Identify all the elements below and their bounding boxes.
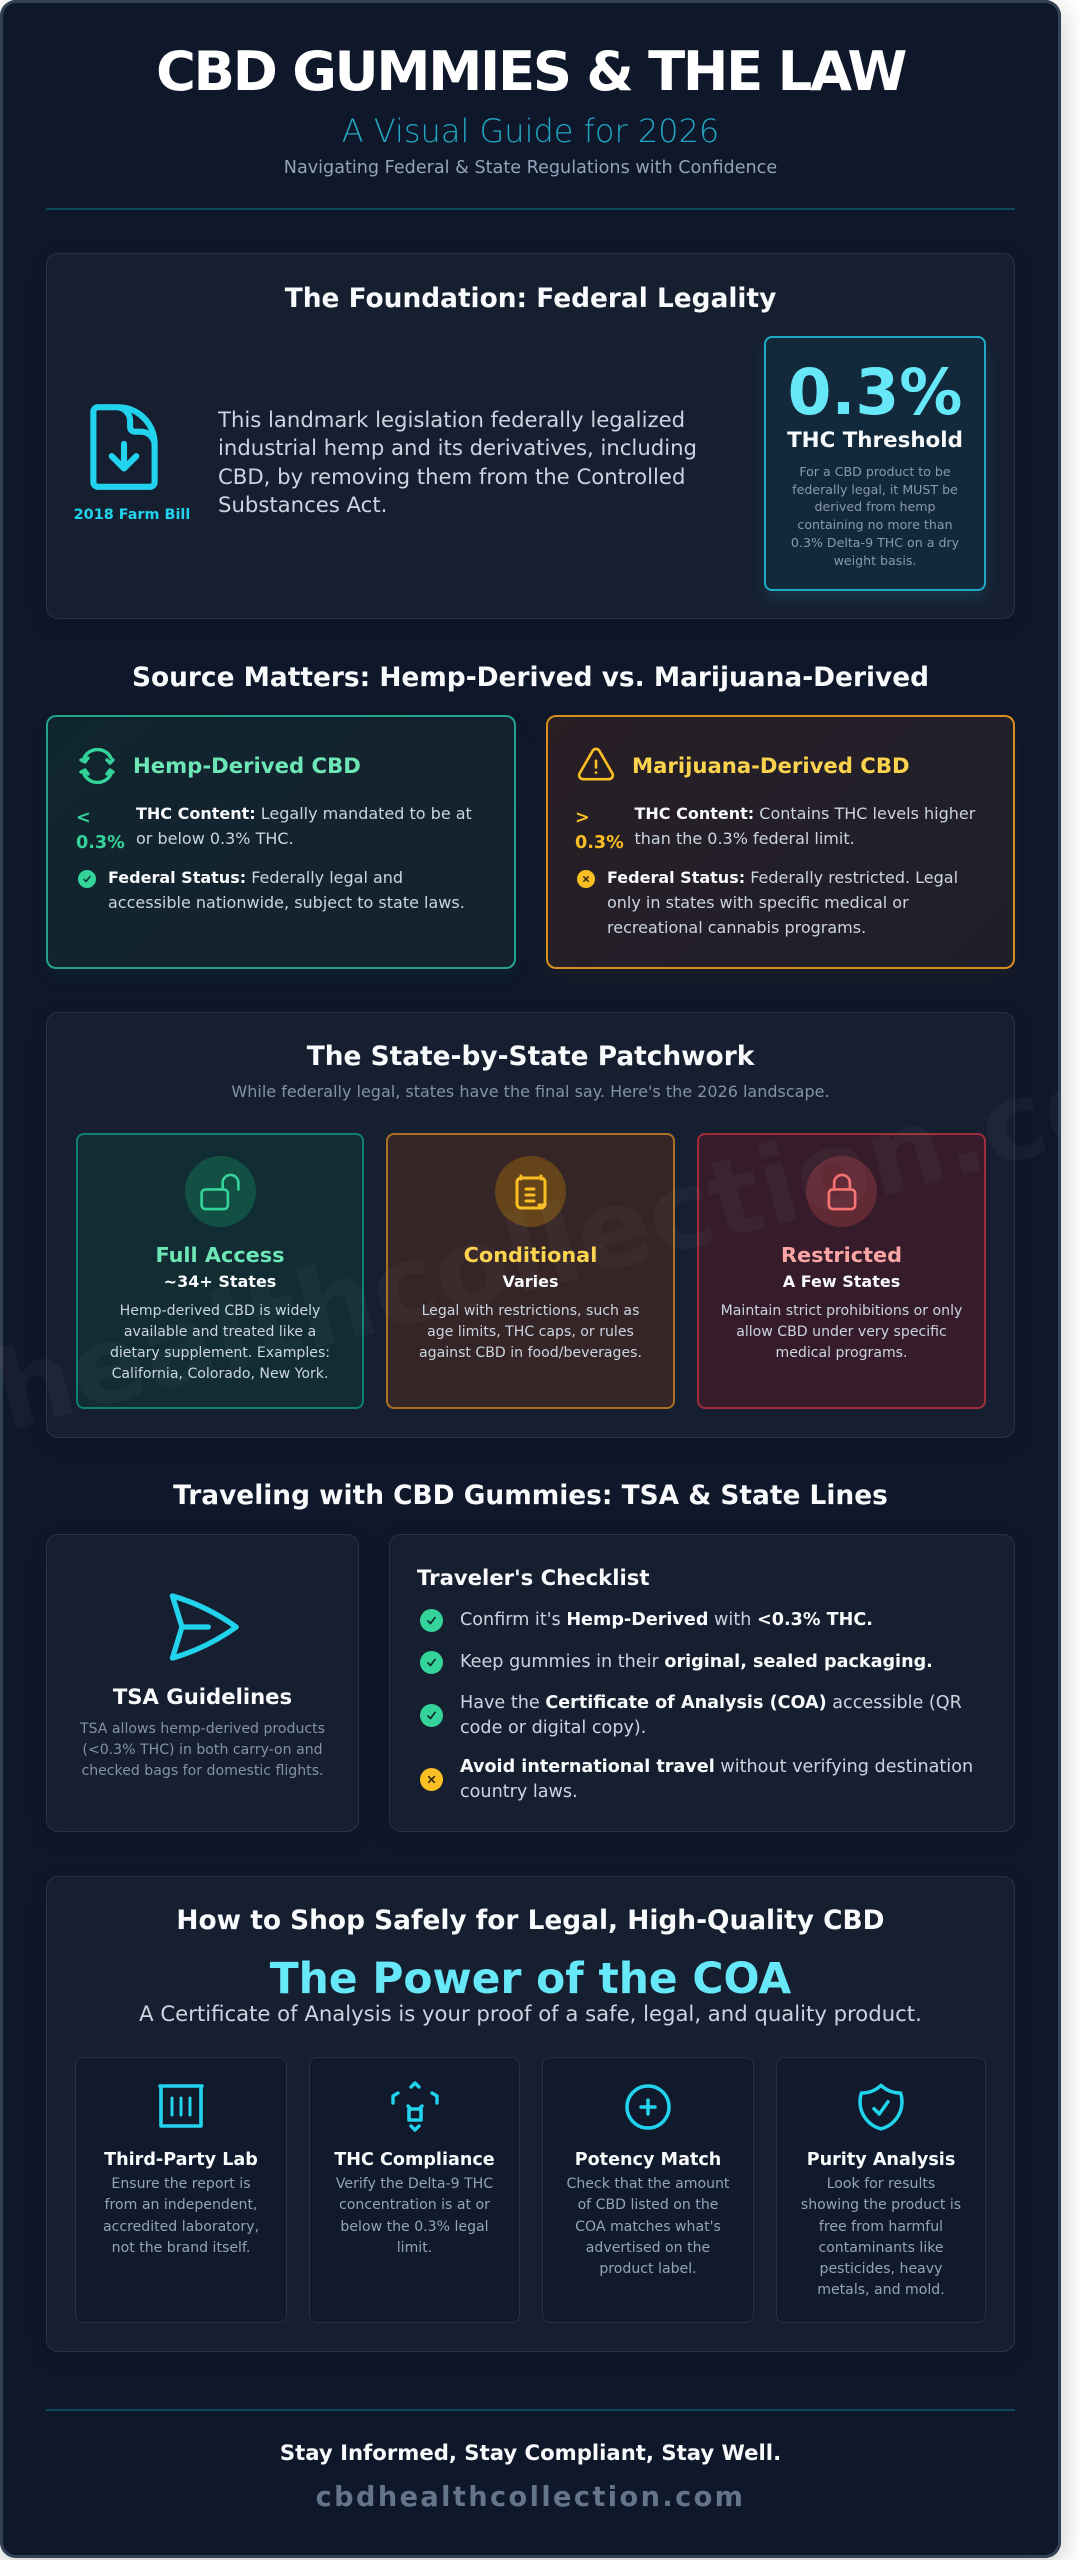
- card title: Restricted: [781, 1243, 902, 1267]
- footer tagline: Stay Informed, Stay Compliant, Stay Well.: [280, 2440, 781, 2465]
- icon: hemp cycle: [79, 748, 115, 784]
- text: COA matches what's: [575, 2219, 721, 2235]
- card text: [721, 1302, 962, 1361]
- card text: [419, 1302, 642, 1361]
- callout text: For a CBD product to be: [799, 464, 951, 479]
- text: [336, 2176, 493, 2256]
- text: from an independent,: [105, 2197, 257, 2213]
- card: conditional: [386, 1133, 675, 1409]
- panel: federal legality: [46, 253, 1015, 619]
- title: Potency Match: [575, 2150, 721, 2170]
- text: accredited laboratory,: [103, 2219, 259, 2235]
- thc content text: THC Content: Legally mandated to be at: [136, 804, 472, 823]
- text: [801, 2176, 961, 2298]
- callout: thc threshold: [764, 336, 986, 591]
- checklist item 4: country laws.: [460, 1782, 578, 1802]
- card: thc compliance: [309, 2057, 520, 2323]
- text: Look for results: [827, 2176, 935, 2192]
- icon: compliance arrows: [391, 2081, 439, 2132]
- card text: California, Colorado, New York.: [112, 1366, 328, 1382]
- card text: age limits, THC caps, or rules: [427, 1324, 634, 1340]
- text: Check that the amount: [567, 2176, 729, 2192]
- icon: check: [420, 1704, 443, 1727]
- thc content text: than the 0.3% federal limit.: [634, 829, 855, 848]
- text: checked bags for domestic flights.: [81, 1763, 324, 1779]
- callout heading: THC Threshold: [787, 428, 963, 452]
- federal status text: accessible nationwide, subject to state laws.: [108, 892, 465, 912]
- text: limit.: [397, 2240, 432, 2256]
- federal status text: [108, 868, 465, 912]
- thc content text: or below 0.3% THC.: [136, 829, 294, 848]
- card text: available and treated like a: [124, 1324, 316, 1340]
- text: [103, 2176, 259, 2256]
- text: [567, 2176, 730, 2277]
- checklist item 4: [460, 1756, 973, 1802]
- panel: marijuana-derived: [546, 715, 1015, 969]
- federal status text: [607, 868, 958, 936]
- farm bill description: industrial hemp and its derivatives, including: [218, 435, 697, 460]
- icon: cross: [420, 1768, 443, 1791]
- panel: hemp-derived: [46, 715, 516, 969]
- text: TSA allows hemp-derived products: [80, 1720, 325, 1736]
- farm bill description: Substances Act.: [218, 492, 387, 517]
- heading: Marijuana-Derived CBD: [632, 752, 910, 778]
- state count: ~34+ States: [164, 1272, 276, 1291]
- icon: warning triangle: [578, 748, 614, 780]
- text: [80, 1720, 325, 1779]
- panel: tsa guidelines: [46, 1534, 359, 1832]
- thc badge: [76, 808, 125, 853]
- thc badge: <: [76, 808, 91, 828]
- subtitle: A Visual Guide for 2026: [342, 112, 719, 150]
- icon circle: unlocked: [184, 1156, 256, 1227]
- checklist item 3: code or digital copy).: [460, 1718, 646, 1738]
- text: (<0.3% THC) in both carry-on and: [82, 1742, 323, 1758]
- title: Purity Analysis: [807, 2150, 955, 2170]
- text: of CBD listed on the: [578, 2197, 718, 2213]
- icon: document download: [90, 404, 158, 490]
- text: metals, and mold.: [817, 2282, 945, 2298]
- federal status text: only in states with specific medical or: [607, 892, 909, 912]
- heading: the foundation: The Foundation: Federal Legality: [285, 283, 776, 314]
- state count: Varies: [502, 1272, 559, 1291]
- card text: Legal with restrictions, such as: [422, 1302, 639, 1318]
- heading: Hemp-Derived CBD: [133, 752, 361, 778]
- heading: traveling: Traveling with CBD Gummies: TSA & State Lines: [173, 1480, 888, 1511]
- farm bill description: [218, 407, 697, 517]
- thc badge: 0.3%: [76, 833, 125, 853]
- text: concentration is at or: [339, 2197, 490, 2213]
- heading: TSA Guidelines: [113, 1684, 292, 1709]
- thc content text: [634, 804, 976, 848]
- text: pesticides, heavy: [820, 2261, 942, 2277]
- heading: Traveler's Checklist: [417, 1565, 650, 1590]
- icon: check: [78, 870, 96, 888]
- tagline: Navigating Federal & State Regulations with Confidence: [284, 158, 777, 178]
- checklist item 4: Avoid international travel without verifying destination: [460, 1756, 973, 1776]
- callout text: 0.3% Delta-9 THC on a dry: [791, 535, 959, 550]
- card: third-party lab: [75, 2057, 287, 2323]
- icon: cross: [577, 870, 595, 888]
- thc badge: >: [575, 808, 590, 828]
- icon: paper airplane: [170, 1593, 239, 1661]
- thc badge: 0.3%: [575, 833, 624, 853]
- footer website: cbdhealthcollection.com: [316, 2482, 745, 2512]
- checklist item 1: Confirm it's Hemp-Derived with <0.3% THC.: [460, 1610, 873, 1630]
- card text: Maintain strict prohibitions or only: [721, 1302, 962, 1318]
- icon: shield check: [858, 2084, 904, 2131]
- title: THC Compliance: [334, 2150, 495, 2170]
- callout text: containing no more than: [797, 517, 953, 532]
- callout text: [791, 464, 959, 568]
- farm bill description: This landmark legislation federally legalized: [218, 407, 685, 432]
- card text: dietary supplement. Examples:: [110, 1345, 330, 1361]
- title: CBD GUMMIES & THE LAW: [156, 40, 905, 103]
- farm bill description: CBD, by removing them from the Controlled: [218, 464, 685, 489]
- panel: state patchwork: [46, 1012, 1015, 1438]
- card: purity analysis: [776, 2057, 986, 2323]
- thc content text: [136, 804, 472, 848]
- text: not the brand itself.: [112, 2240, 250, 2256]
- big number: 0.3%: [788, 356, 962, 429]
- card: restricted: [697, 1133, 986, 1409]
- subheading: While federally legal, states have the final say. Here's the 2026 landscape.: [231, 1082, 830, 1101]
- icon: plus circle: [625, 2084, 671, 2130]
- heading: How to Shop Safely for Legal, High-Quality CBD: [176, 1905, 885, 1936]
- heading: The State-by-State Patchwork: [307, 1041, 754, 1072]
- callout text: derived from hemp: [815, 499, 935, 514]
- callout text: weight basis.: [834, 553, 916, 568]
- state count: A Few States: [783, 1272, 900, 1291]
- icon: check: [420, 1609, 443, 1632]
- text: showing the product is: [801, 2197, 961, 2213]
- checklist item 2: Keep gummies in their original, sealed packaging.: [460, 1652, 933, 1672]
- card text: [110, 1302, 330, 1382]
- text: Verify the Delta-9 THC: [336, 2176, 493, 2192]
- card text: Hemp-derived CBD is widely: [120, 1302, 320, 1318]
- checklist item 3: Have the Certificate of Analysis (COA) accessible (QR: [460, 1692, 962, 1712]
- icon: check: [420, 1651, 443, 1674]
- card text: medical programs.: [775, 1345, 908, 1361]
- icon circle: locked: [806, 1156, 877, 1227]
- text: product label.: [599, 2261, 697, 2277]
- panel: shop safely: [46, 1876, 1015, 2352]
- card text: against CBD in food/beverages.: [419, 1345, 642, 1361]
- text: contaminants like: [818, 2240, 944, 2256]
- text: advertised on the: [586, 2240, 710, 2256]
- federal status text: Federal Status: Federally restricted. Legal: [607, 868, 958, 886]
- text: Ensure the report is: [111, 2176, 251, 2192]
- federal status text: recreational cannabis programs.: [607, 918, 866, 936]
- panel: traveler's checklist: [389, 1534, 1015, 1832]
- card title: Conditional: [464, 1243, 597, 1267]
- text: free from harmful: [819, 2219, 943, 2235]
- text: below the 0.3% legal: [340, 2219, 489, 2235]
- card text: allow CBD under very specific: [736, 1324, 947, 1340]
- callout text: federally legal, it MUST be: [792, 482, 958, 497]
- thc content text: THC Content: Contains THC levels higher: [634, 804, 975, 823]
- heading: power of the coa: The Power of the COA: [270, 1954, 791, 2003]
- checklist item 3: [460, 1692, 962, 1738]
- icon circle: clipboard: [495, 1156, 566, 1227]
- thc badge: [575, 808, 624, 853]
- label: 2018 farm bill: 2018 Farm Bill: [74, 507, 190, 523]
- card: potency match: [542, 2057, 754, 2323]
- heading: source matters: Source Matters: Hemp-Derived vs. Marijuana-Derived: [132, 662, 929, 693]
- card: full access: [76, 1133, 364, 1409]
- icon: lab report: [158, 2084, 204, 2128]
- federal status text: Federal Status: Federally legal and: [108, 868, 403, 886]
- subheading: A Certificate of Analysis is your proof of a safe, legal, and quality product.: [139, 2001, 922, 2026]
- card title: Full Access: [155, 1243, 285, 1267]
- title: Third-Party Lab: [104, 2150, 258, 2170]
